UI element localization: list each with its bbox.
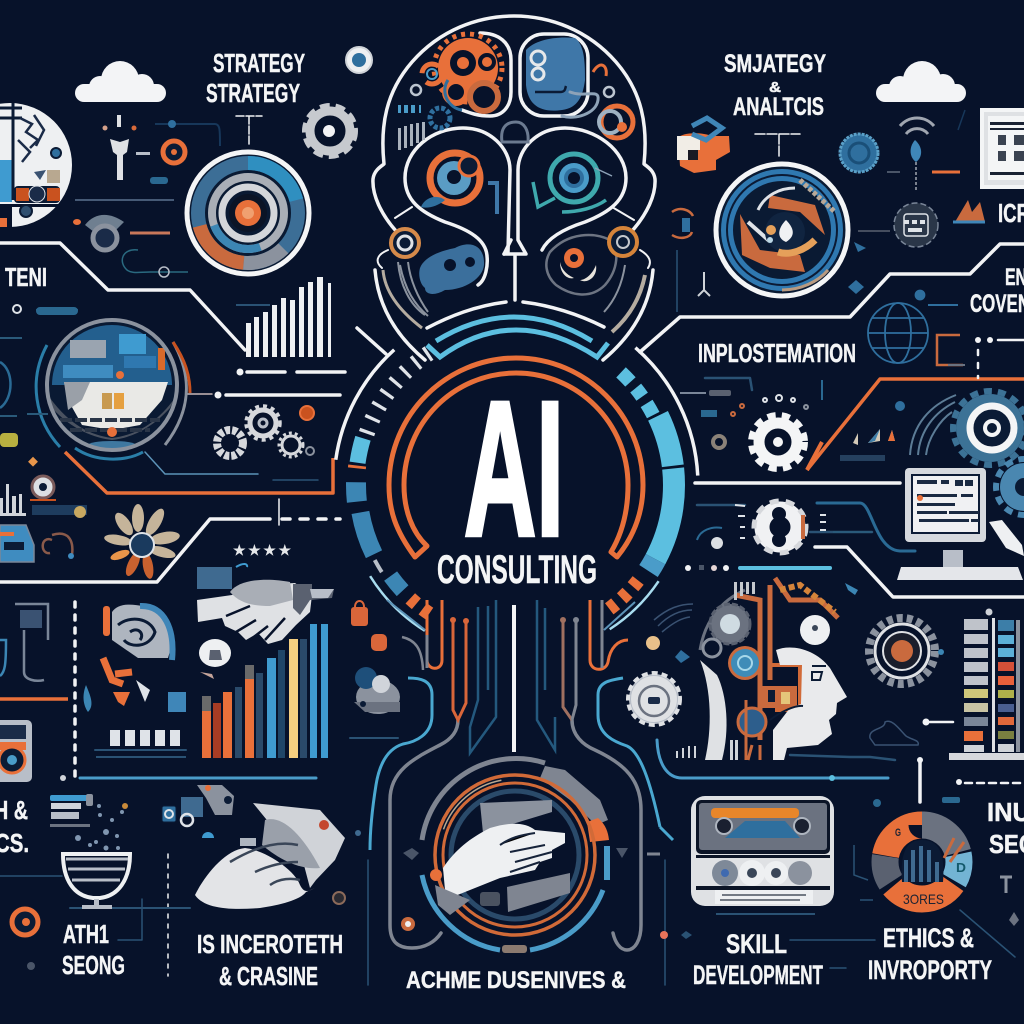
chart: analytics dial right (716, 164, 848, 296)
icon: white cog badge (628, 673, 680, 725)
icon: fan gauge (73, 215, 188, 277)
label: TEDI: TENI (5, 262, 47, 292)
chart: donut scores: G (895, 827, 901, 839)
icon: flower (103, 504, 181, 580)
brain icon: orange gears upper left (398, 34, 502, 150)
heading: strategy and analytics: ANALTCIS (733, 93, 824, 121)
icon: grey cloud robot (354, 667, 400, 714)
chart: server tower (949, 608, 1024, 760)
labels: skill development (693, 929, 823, 990)
icon: stylised brain badge (84, 605, 186, 757)
brain icon: lower left blue blob (378, 229, 484, 315)
icon: left mini bars (0, 433, 87, 562)
icon: AI head profile (676, 578, 858, 760)
chart: colour bars (202, 624, 328, 758)
icon: computer monitor with hand (897, 468, 1024, 580)
label: research and analytics fragment (0, 795, 29, 858)
icon: small connector tool (75, 115, 220, 200)
heading: strategy: STRATEGY (206, 78, 300, 108)
cloud left (75, 61, 166, 102)
icon: right target (895, 391, 1024, 515)
icon: central hands circle (401, 758, 609, 953)
central ring (334, 303, 698, 667)
label: ath seong: ATH1 (63, 919, 109, 949)
cloud right (876, 61, 966, 102)
label: is incerotecth and crasine: IS INCEROTETH (197, 929, 343, 959)
label: is incerotecth and crasine (197, 929, 343, 991)
labels: ethics and property (868, 923, 992, 985)
icon: dark ring gear (869, 618, 944, 684)
icon: white gear (304, 105, 356, 157)
labels: skill development: DEVELOPMENT (693, 960, 823, 990)
title: consulting: CONSULTING (437, 548, 597, 592)
label: implementation: INPLOSTEMATION (698, 338, 856, 368)
chart: thin white bars (236, 277, 331, 357)
heading: strategy and analytics: & (769, 79, 781, 96)
chart: donut scores (854, 797, 966, 907)
labels: skill development: SKILL (726, 929, 787, 959)
icon: cameras device (162, 785, 234, 838)
icon: data particles and books (50, 794, 128, 850)
heading: strategy and analytics: SMJATEGY (724, 50, 826, 78)
heading: strategy: STRATEGY (213, 48, 305, 78)
icon: retro device (691, 796, 834, 914)
heading: strategy and analytics (724, 50, 826, 121)
label: ath seong: SEONG (62, 950, 125, 980)
brain lobes (462, 33, 511, 116)
icon: orange puzzle (672, 118, 730, 312)
heading: strategy (206, 48, 305, 108)
icon: dial with control panel (0, 305, 190, 459)
icon: window panel (982, 110, 1024, 187)
chart: donut scores: 3ORES (903, 891, 944, 907)
icon: robot and human hands (195, 803, 361, 909)
labels: ethics and property: ETHICS & (883, 923, 974, 953)
segmented blue ring (334, 303, 698, 667)
bottom flask outline (370, 600, 673, 950)
icon: small markers (660, 877, 1019, 939)
icon: white bowl (63, 854, 130, 909)
icon: sketch arches (654, 604, 918, 745)
brain icon: orange eye (421, 153, 497, 214)
icon: top-left globe dial (0, 103, 72, 230)
icon: white pill (199, 639, 231, 679)
icon: orange badge left panel (0, 604, 66, 782)
icon: peach dot and gem (646, 636, 690, 663)
brain icon: blue robot face (526, 38, 633, 138)
icon: gears trio (217, 406, 314, 457)
brain icon: lower right eye (546, 228, 650, 294)
icon: top small badge (346, 47, 372, 73)
white face (773, 647, 847, 760)
head outline (373, 16, 655, 360)
icon: wifi node (840, 110, 985, 294)
icon: handshake (197, 564, 334, 644)
label: EN COVEN (970, 264, 1024, 318)
rating stars: ★★★★ (233, 542, 291, 558)
orange arcs (389, 358, 643, 557)
icon: orange ring (12, 909, 38, 970)
label: ath seong (62, 919, 125, 980)
labels: industry security fragment (987, 797, 1024, 859)
brain icon: teal eye (533, 154, 612, 212)
icon: gear right mid (680, 380, 895, 470)
icon: globe (868, 290, 965, 365)
label: is incerotecth and crasine: & CRASINE (219, 961, 318, 991)
label: achieve business: ACHME DUSENIVES & (406, 967, 626, 994)
icon: orange bag and lock (351, 601, 387, 651)
chart: target dial left (187, 152, 309, 274)
title: AI: AI (464, 361, 564, 576)
chart: donut scores: D (956, 860, 966, 875)
icon: gear centre right (697, 501, 872, 553)
